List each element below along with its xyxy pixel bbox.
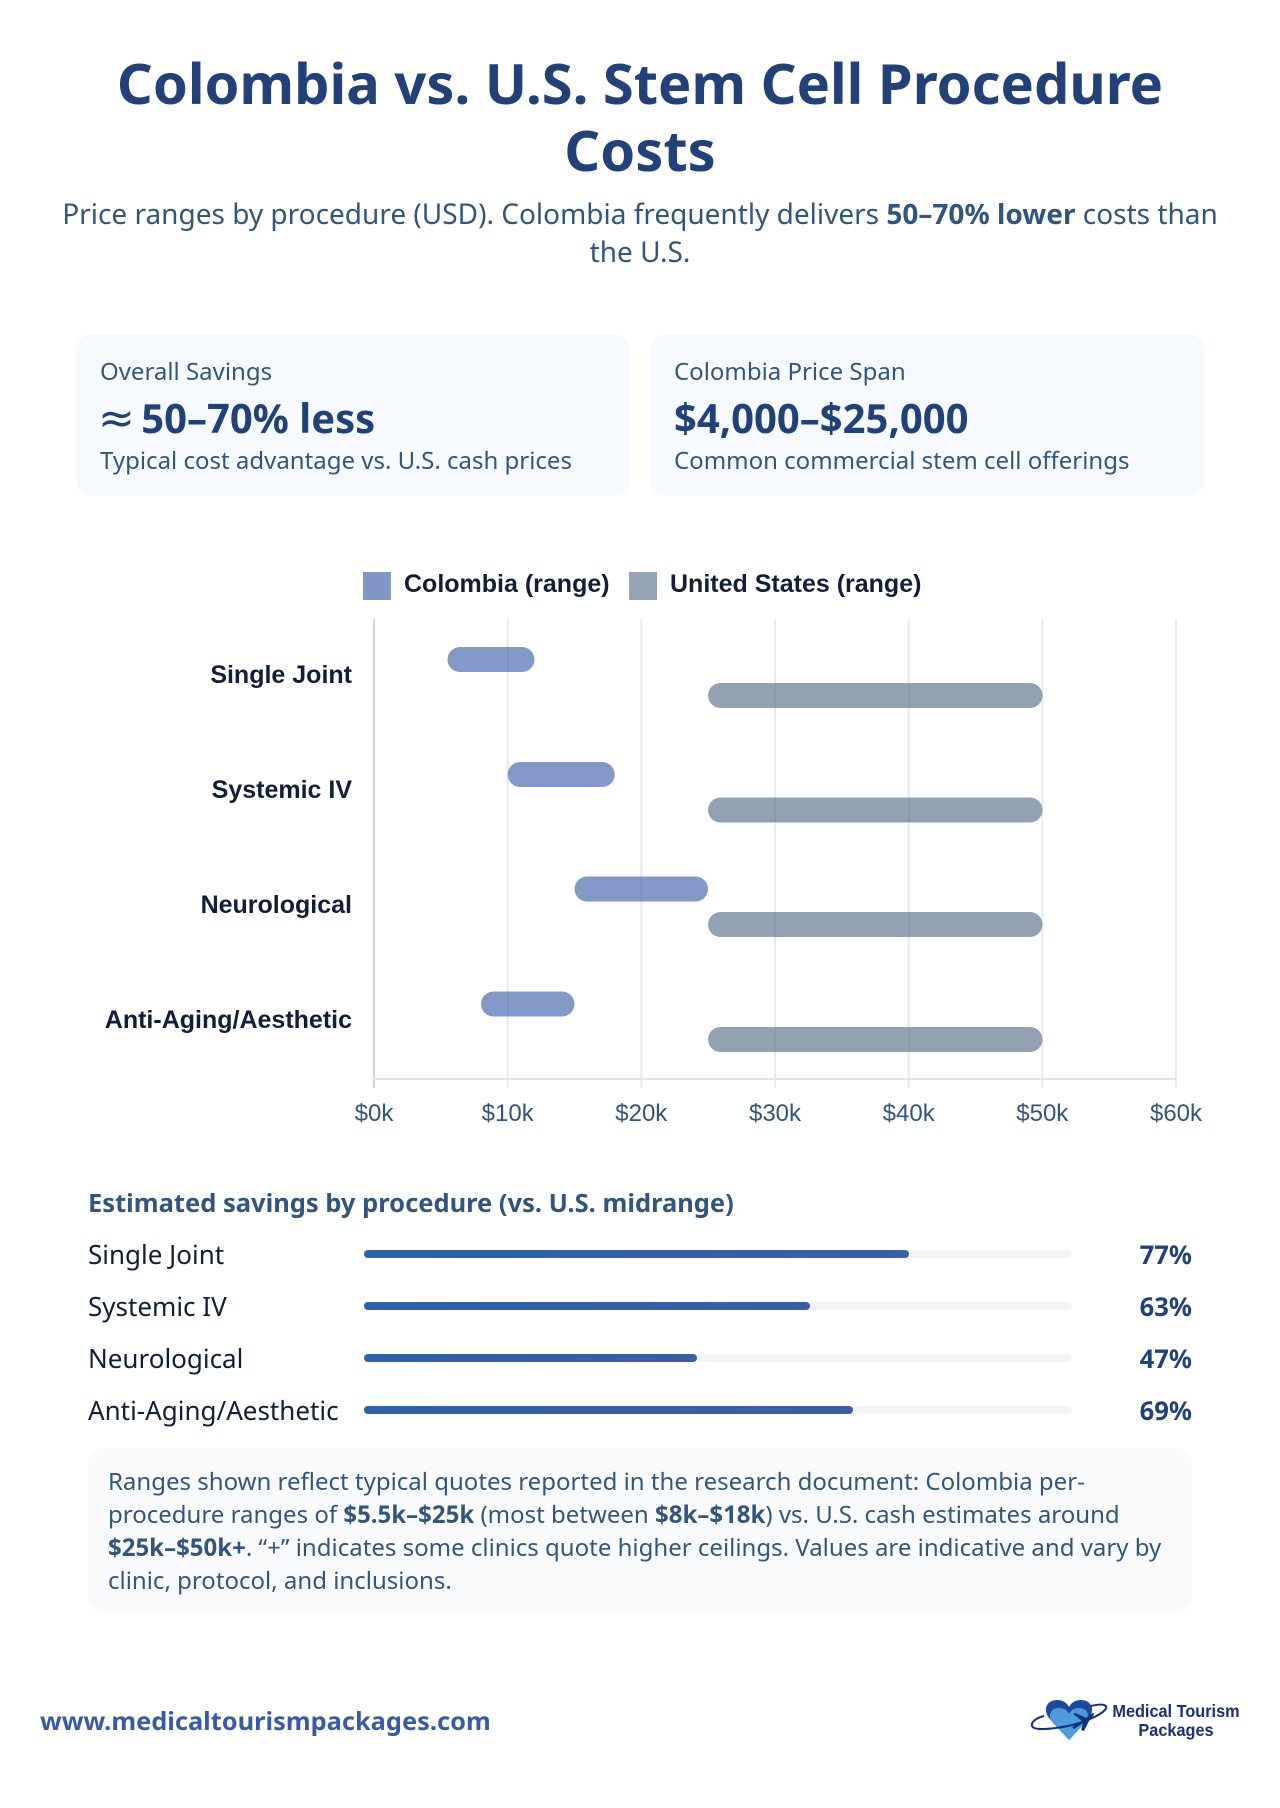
- logo text: [1112, 1701, 1240, 1740]
- card note: Common commercial stem cell offerings: [674, 444, 1129, 477]
- x axis labels: $20k: [615, 1100, 668, 1127]
- row: neurological: Neurological: [201, 891, 352, 919]
- logo text: Medical Tourism: [1112, 1701, 1240, 1721]
- card label: Colombia Price Span: [674, 355, 906, 388]
- x axis labels: $0k: [355, 1100, 394, 1127]
- x axis labels: $40k: [883, 1100, 936, 1127]
- row: single joint: Single Joint: [210, 661, 353, 689]
- logo text: Packages: [1138, 1720, 1214, 1740]
- icon: heart with plane: [1030, 1700, 1108, 1740]
- row value: 69%: [1140, 1393, 1192, 1428]
- note text: Ranges shown reflect typical quotes reported in the research document: Colombia per-: [108, 1465, 1085, 1498]
- card value: ≈ 50–70% less: [98, 390, 375, 445]
- row label: Neurological: [88, 1340, 243, 1376]
- x axis labels: [355, 1100, 1203, 1127]
- x axis labels: $30k: [749, 1100, 802, 1127]
- row value: 77%: [1140, 1237, 1192, 1272]
- savings bar: [364, 1302, 1072, 1310]
- row: single joint: [210, 647, 1042, 708]
- legend: united states: United States (range): [670, 570, 921, 598]
- panel: colombia price span: [650, 334, 1204, 496]
- row label: Anti-Aging/Aesthetic: [88, 1392, 339, 1428]
- row: anti-aging/aesthetic: [105, 992, 1042, 1052]
- note text: [108, 1465, 1162, 1597]
- savings bar: [364, 1406, 1072, 1414]
- legend: colombia: Colombia (range): [404, 570, 610, 598]
- savings bar: [364, 1250, 1072, 1258]
- card note: Typical cost advantage vs. U.S. cash prices: [100, 444, 572, 477]
- x axis labels: $50k: [1016, 1100, 1069, 1127]
- row label: Single Joint: [88, 1236, 224, 1272]
- x axis labels: $10k: [482, 1100, 535, 1127]
- card value: $4,000–$25,000: [674, 390, 968, 445]
- title: Colombia vs. U.S. Stem Cell Procedure: [117, 45, 1163, 121]
- row label: Systemic IV: [88, 1288, 227, 1324]
- savings heading: Estimated savings by procedure (vs. U.S. midrange): [88, 1186, 734, 1220]
- subtitle: [62, 195, 1218, 271]
- title: Costs: [564, 112, 716, 188]
- subtitle: the U.S.: [590, 233, 690, 271]
- row: anti-aging/aesthetic: Anti-Aging/Aesthetic: [105, 1006, 352, 1034]
- note text: $25k–$50k+. “+” indicates some clinics quote higher ceilings. Values are indicative and vary by: [108, 1531, 1161, 1564]
- row value: 47%: [1140, 1341, 1192, 1376]
- logo: [1030, 1700, 1240, 1740]
- footer url: www.medicaltourismpackages.com: [40, 1704, 491, 1738]
- x axis labels: $60k: [1150, 1100, 1203, 1127]
- savings rows: [88, 1236, 1192, 1428]
- title: [117, 45, 1163, 188]
- note box: [88, 1448, 1192, 1612]
- legend: [363, 570, 921, 600]
- savings bar: [364, 1354, 1072, 1362]
- card label: Overall Savings: [100, 355, 272, 388]
- subtitle: Price ranges by procedure (USD). Colombia frequently delivers 50–70% lower costs than: [62, 195, 1218, 233]
- row: systemic iv: [212, 762, 1042, 822]
- range bar chart: [105, 570, 1203, 1127]
- note text: clinic, protocol, and inclusions.: [108, 1564, 452, 1597]
- note text: procedure ranges of $5.5k–$25k (most between $8k–$18k) vs. U.S. cash estimates around: [108, 1498, 1120, 1531]
- row value: 63%: [1140, 1289, 1192, 1324]
- row: neurological: [201, 876, 1042, 937]
- panel: overall savings: [76, 334, 630, 496]
- row: systemic iv: Systemic IV: [212, 776, 352, 804]
